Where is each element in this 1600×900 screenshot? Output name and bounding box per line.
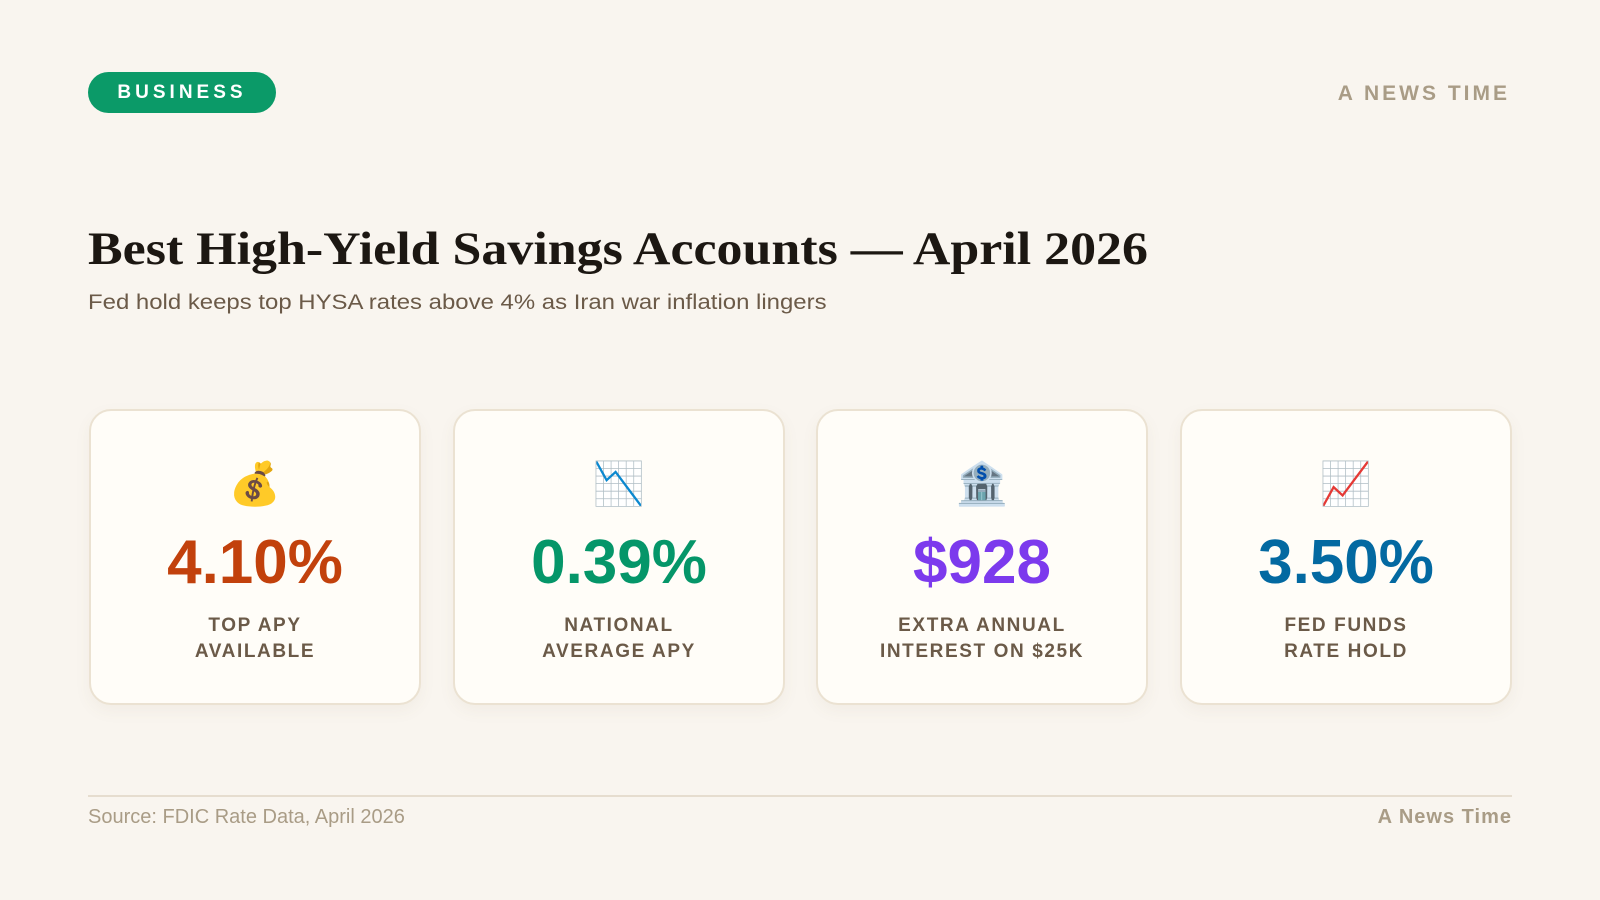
card: top APY bbox=[89, 409, 421, 705]
label: NATIONAL bbox=[564, 615, 674, 636]
icon: chart down: 📉 bbox=[593, 459, 645, 508]
label: RATE HOLD bbox=[1284, 641, 1408, 662]
brand top right: A NEWS TIME bbox=[1338, 82, 1510, 105]
label: EXTRA ANNUAL bbox=[898, 615, 1066, 636]
icon: bank: 🏦 bbox=[956, 459, 1008, 508]
category pill bbox=[88, 72, 276, 113]
category pill: BUSINESS bbox=[117, 82, 247, 103]
card: fed funds bbox=[1180, 409, 1512, 705]
value: 4.10% bbox=[167, 528, 343, 597]
subtitle: Fed hold keeps top HYSA rates above 4% as Iran war inflation lingers bbox=[88, 291, 827, 314]
icon: chart up: 📈 bbox=[1320, 459, 1372, 508]
label: FED FUNDS bbox=[1284, 615, 1408, 636]
label: INTEREST ON $25K bbox=[880, 641, 1084, 662]
value: 0.39% bbox=[531, 528, 707, 597]
label: AVAILABLE bbox=[195, 641, 315, 662]
label bbox=[880, 615, 1084, 662]
value: 3.50% bbox=[1258, 528, 1434, 597]
source: Source: FDIC Rate Data, April 2026 bbox=[88, 806, 405, 828]
icon: money bag: 💰 bbox=[229, 459, 281, 508]
title: Best High-Yield Savings Accounts — April 2026 bbox=[88, 223, 1148, 275]
card: extra interest bbox=[816, 409, 1148, 705]
card: national average bbox=[453, 409, 785, 705]
footer brand: A News Time bbox=[1378, 806, 1512, 828]
label: AVERAGE APY bbox=[542, 641, 696, 662]
label bbox=[542, 615, 696, 662]
label bbox=[1284, 615, 1408, 662]
label: TOP APY bbox=[208, 615, 302, 636]
label bbox=[195, 615, 315, 662]
value: $928 bbox=[913, 528, 1051, 597]
